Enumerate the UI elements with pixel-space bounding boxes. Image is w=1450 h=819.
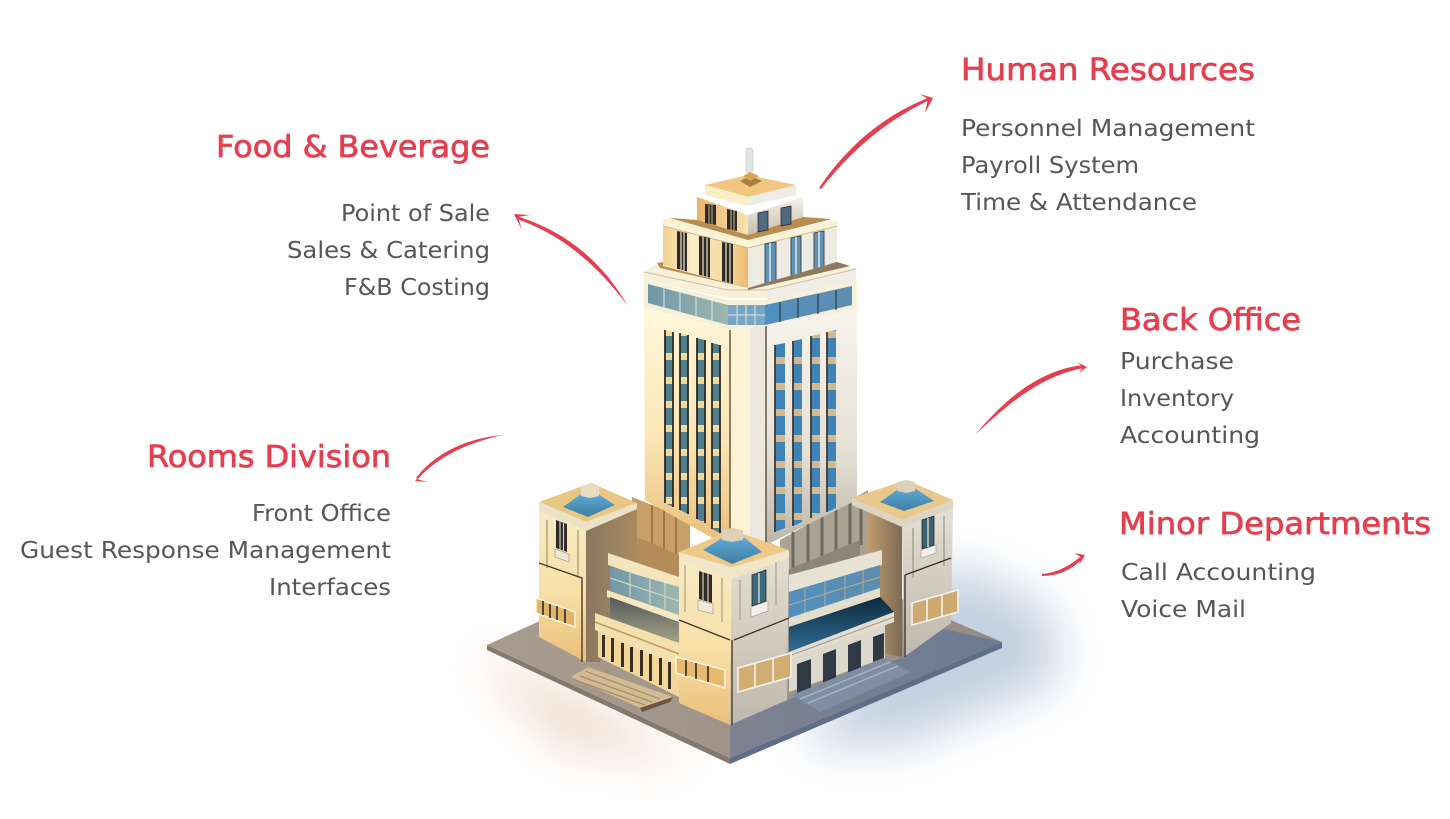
arrow: to Rooms Division [415, 435, 503, 482]
building illustration [470, 148, 1060, 765]
text block: Food & Beverage [216, 130, 490, 301]
left corner block [536, 483, 637, 662]
heading: Rooms Division: Rooms Division [147, 440, 391, 475]
spire [740, 148, 762, 187]
right corner block [852, 480, 958, 657]
heading: Food & Beverage: Food & Beverage [216, 130, 490, 165]
arrow: to Food & Beverage [514, 214, 628, 306]
tower right windows [775, 330, 836, 532]
list: Back Office items: Accounting [1120, 423, 1260, 449]
text block: Rooms Division [20, 440, 391, 601]
third tier [670, 197, 832, 240]
tower [644, 148, 857, 552]
list: Back Office items: Inventory [1120, 386, 1234, 412]
centre right bay window [738, 653, 791, 692]
tower corner pilaster [730, 328, 750, 552]
second tier [663, 218, 837, 288]
left stairs [571, 667, 673, 712]
roof ledge [644, 262, 856, 300]
arrow: to Minor Departments [1042, 553, 1085, 576]
list: Human Resources items: Personnel Management [961, 116, 1255, 142]
left block roof glass [563, 494, 615, 517]
list: Back Office items: Purchase [1120, 349, 1234, 375]
list: Food & Beverage items: Sales & Catering [287, 238, 490, 264]
list: Human Resources items [960, 116, 1255, 216]
base plate [487, 530, 1002, 764]
right stairs [792, 658, 911, 712]
soft ground shadow [470, 560, 1060, 765]
centre block windows [698, 571, 713, 614]
text block: Back Office [1120, 303, 1301, 449]
cap [705, 175, 796, 206]
glass band [644, 280, 857, 330]
tower right face [766, 308, 857, 545]
list: Minor Departments items: Call Accounting [1121, 560, 1316, 586]
left bay window [536, 598, 575, 627]
list: Back Office items [1120, 349, 1260, 449]
rear podium [600, 490, 868, 590]
centre block [676, 528, 791, 725]
heading: Back Office: Back Office [1120, 303, 1301, 338]
arrow: to Human Resources [819, 94, 933, 189]
tower left windows [665, 330, 720, 533]
list: Rooms Division items [20, 501, 391, 601]
right bay window [912, 590, 958, 625]
right block roof glass [880, 489, 934, 511]
tower left face [644, 307, 730, 548]
list: Minor Departments items: Voice Mail [1121, 597, 1246, 623]
list: Rooms Division items: Guest Response Management [20, 538, 391, 564]
list: Rooms Division items: Interfaces [269, 575, 391, 601]
list: Food & Beverage items: Point of Sale [341, 201, 490, 227]
centre left bay window [676, 657, 725, 688]
text block: Human Resources [960, 53, 1255, 216]
arrow: to Back Office [976, 362, 1087, 434]
left block window [555, 520, 569, 562]
list: Human Resources items: Time & Attendance [960, 190, 1197, 216]
right block window [921, 516, 936, 558]
centre block roof glass [703, 538, 762, 564]
list: Human Resources items: Payroll System [961, 153, 1139, 179]
left middle wing [595, 553, 679, 697]
list: Food & Beverage items: F&B Costing [344, 275, 490, 301]
text block: Minor Departments [1119, 507, 1431, 623]
list: Minor Departments items [1121, 560, 1316, 623]
heading: Minor Departments: Minor Departments [1119, 507, 1431, 542]
list: Rooms Division items: Front Office [252, 501, 391, 527]
right middle wing [789, 550, 894, 695]
list: Food & Beverage items [287, 201, 490, 301]
heading: Human Resources: Human Resources [961, 53, 1255, 88]
